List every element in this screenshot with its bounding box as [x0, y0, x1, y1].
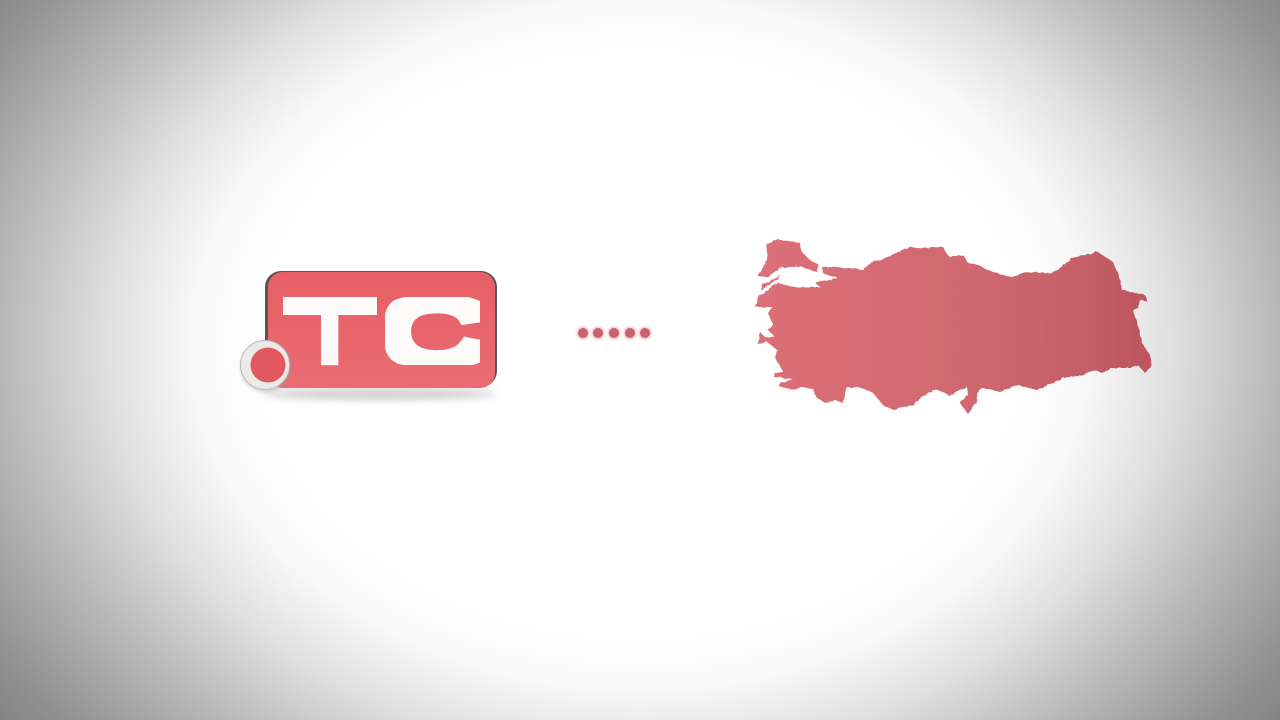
map of Turkey: [755, 239, 1152, 414]
logo letters TC: C: [371, 280, 495, 386]
logo letters TC: [283, 297, 480, 366]
logo letters TC: T: [281, 279, 379, 385]
dotted connector: [576, 326, 652, 340]
logo: TC badge: [240, 271, 497, 400]
logo dot: [240, 340, 291, 392]
